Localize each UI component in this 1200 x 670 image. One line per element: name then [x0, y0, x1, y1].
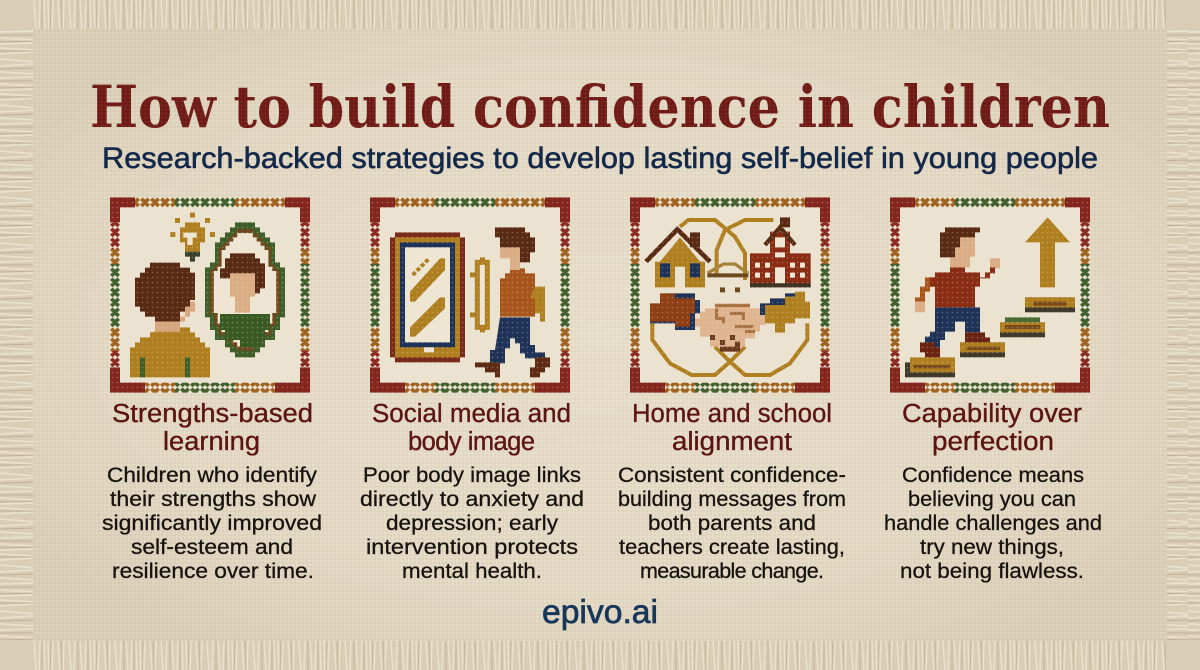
panel: home and school icon — [630, 197, 830, 393]
body text: their strengths show — [110, 487, 316, 511]
body text: teachers create lasting, — [619, 535, 845, 559]
body text: try new things, — [920, 535, 1064, 559]
heading: body image — [408, 428, 535, 456]
body text: Children who identify — [107, 463, 317, 487]
panel: strengths icon, child at mirror — [110, 197, 310, 393]
icon: phone mirror — [390, 232, 465, 362]
climbing child — [915, 227, 1000, 357]
panel text: social media and body image — [360, 400, 584, 583]
body text — [360, 463, 584, 583]
body text: handle challenges and — [884, 511, 1102, 535]
icon: school — [750, 217, 811, 287]
panel text: strengths-based learning — [102, 400, 322, 583]
icon: light bulb — [170, 213, 215, 262]
heading — [112, 400, 313, 456]
body text: mental health. — [402, 559, 542, 583]
body text — [884, 463, 1102, 583]
heading: learning — [163, 428, 260, 456]
icon: house — [646, 229, 710, 287]
heading — [372, 400, 571, 456]
panel: social media icon, phone and walking child — [370, 197, 570, 393]
heading: Home and school — [632, 400, 832, 428]
body text: significantly improved — [102, 511, 322, 535]
steps — [905, 297, 1075, 377]
icon: vibration signal — [470, 257, 487, 332]
subtitle: Research-backed strategies to develop lasting self-belief in young people — [102, 142, 1098, 175]
panel: capability icon, child climbing steps — [890, 197, 1090, 393]
child seen from behind — [130, 263, 210, 377]
body text — [102, 463, 322, 583]
body text: building messages from — [618, 487, 846, 511]
body text: Consistent confidence- — [618, 463, 846, 487]
heading: alignment — [672, 428, 792, 456]
panel text: capability over perfection — [884, 400, 1102, 583]
heading: Capability over — [902, 400, 1083, 428]
icons group one: strengths and social media — [110, 197, 570, 393]
heading: Strengths-based — [112, 400, 313, 428]
icon: handshake — [650, 292, 810, 352]
body text: intervention protects — [366, 535, 578, 559]
walking child — [475, 227, 550, 377]
brand footer: epivo.ai — [542, 593, 658, 630]
body text: Poor body image links — [363, 463, 581, 487]
body text: both parents and — [648, 511, 816, 535]
connecting gold rings — [652, 220, 807, 375]
body text: measurable change. — [640, 559, 824, 583]
body text — [618, 463, 846, 583]
body text: Confidence means — [902, 463, 1084, 487]
body text: depression; early — [386, 511, 558, 535]
heading — [902, 400, 1083, 456]
panel text: home and school alignment — [618, 400, 846, 583]
heading — [632, 400, 832, 456]
heading: Social media and — [372, 400, 571, 428]
icon: up arrow — [1025, 217, 1070, 287]
body text: not being flawless. — [900, 559, 1084, 583]
mirror with reflection — [205, 222, 285, 357]
body text: believing you can — [908, 487, 1076, 511]
body text: self-esteem and — [131, 535, 293, 559]
body text: resilience over time. — [112, 559, 314, 583]
heading: perfection — [932, 428, 1054, 456]
icons group two: alignment and capability — [630, 197, 1090, 393]
body text: directly to anxiety and — [360, 487, 584, 511]
